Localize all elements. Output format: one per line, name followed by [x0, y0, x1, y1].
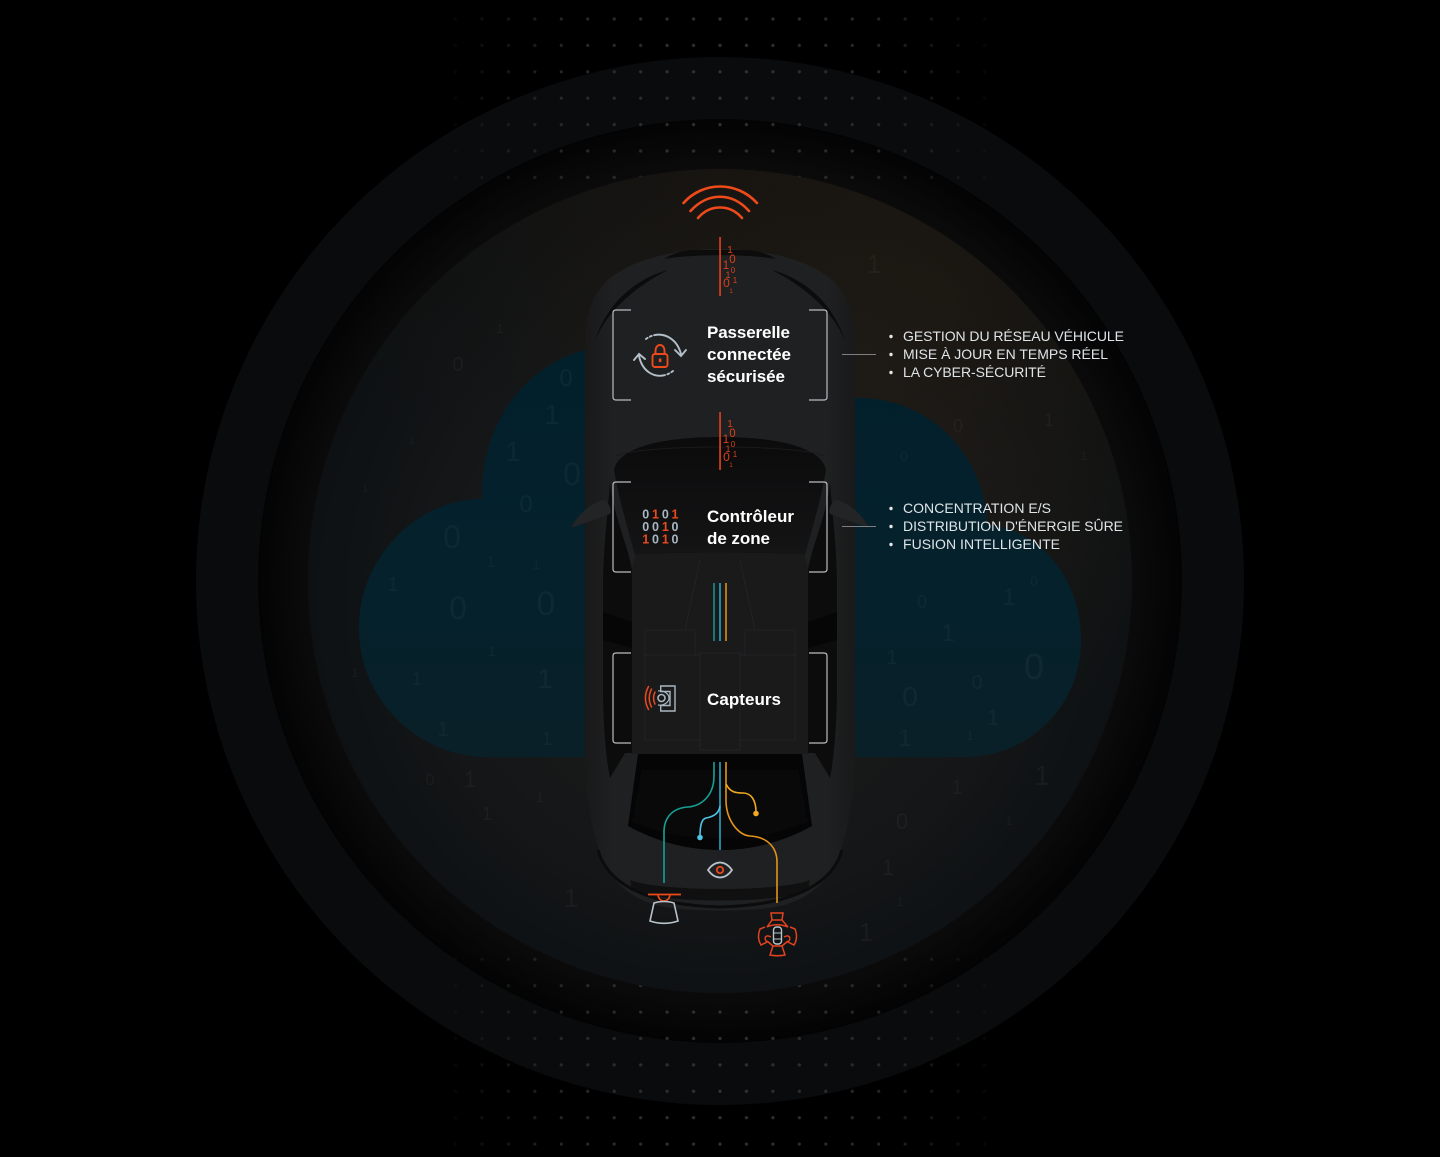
data link: binary stream middle: 1 — [725, 444, 731, 454]
data link: binary stream top: 1 — [727, 245, 733, 256]
background binary digits: 1 — [487, 554, 496, 571]
background binary digits: 1 — [951, 777, 963, 799]
windshield — [614, 437, 826, 555]
data link: binary stream top: 1 — [733, 276, 738, 285]
data link: binary stream middle: 1 — [723, 434, 729, 446]
background binary digits: 1 — [533, 558, 540, 572]
background binary digits: 1 — [1006, 814, 1013, 828]
background binary digits: 1 — [482, 804, 492, 824]
background binary digits: 0 — [537, 585, 555, 623]
text list: zone controller functions — [889, 500, 1123, 552]
side window dark bands — [603, 612, 837, 648]
background binary digits: 0 — [1024, 646, 1044, 687]
background binary digits: 1 — [967, 729, 974, 743]
connector line zone controller — [842, 526, 876, 528]
cabin interior — [632, 553, 808, 754]
icon: radar sensor — [648, 894, 681, 923]
orange wire to surround sensor — [726, 762, 777, 903]
background binary digits: 1 — [882, 855, 894, 880]
teal wire to radar — [664, 762, 714, 883]
data link: binary stream top — [719, 237, 738, 296]
wires to rear sensors — [664, 762, 777, 903]
icon: binary grid: 1 — [652, 508, 659, 522]
heading: Passerelle connectée sécurisée: Passerelle — [707, 323, 790, 342]
text list: zone controller functions: FUSION INTELLIGENTE — [903, 536, 1060, 552]
car top view — [571, 249, 869, 910]
background binary digits: 1 — [409, 436, 415, 447]
data link: binary stream middle: 0 — [723, 450, 730, 464]
icon: binary grid: 0 — [652, 532, 659, 546]
text list: zone controller functions: CONCENTRATION E/S — [903, 500, 1051, 516]
wires between controller and sensors — [714, 583, 726, 641]
background binary digits: 1 — [867, 249, 881, 279]
background binary digits — [352, 249, 1088, 947]
heading: Capteurs: Capteurs — [707, 690, 781, 709]
background binary digits: 0 — [443, 519, 461, 555]
data link: binary stream middle: 1 — [733, 450, 738, 459]
bracket frame — [613, 310, 827, 400]
background binary digits: 1 — [505, 436, 521, 467]
light blue branch — [697, 806, 720, 840]
background binary digits: 1 — [544, 399, 560, 430]
icon: binary grid: 1 — [642, 532, 649, 546]
text list: gateway functions: MISE À JOUR EN TEMPS RÉEL — [903, 346, 1108, 362]
icon: binary grid: 0 — [652, 520, 659, 534]
connector line gateway — [842, 354, 876, 356]
background binary digits: 1 — [897, 895, 904, 909]
panel: zone controller — [613, 482, 827, 572]
hood vents — [595, 250, 845, 340]
text list: gateway functions: LA CYBER-SÉCURITÉ — [903, 364, 1046, 380]
cloud — [359, 345, 1081, 757]
data link: binary stream top: 0 — [729, 254, 736, 266]
background binary digits: 0 — [900, 448, 908, 464]
icon: binary grid: 1 — [662, 532, 669, 546]
heading: Passerelle connectée sécurisée: connectée — [707, 345, 791, 364]
text list: zone controller functions: DISTRIBUTION D'ÉNERGIE SÛRE — [903, 518, 1123, 534]
panel: sensors — [613, 653, 827, 743]
orange branch — [726, 784, 759, 816]
heading: Passerelle connectée sécurisée — [707, 323, 791, 386]
icon: camera eye — [708, 862, 732, 878]
interior seats — [645, 560, 795, 750]
background binary digits: 1 — [1044, 410, 1054, 430]
icon: rotating padlock — [634, 335, 686, 376]
icon: binary grid: 0 — [662, 508, 669, 522]
data link: binary stream middle: 1 — [727, 419, 733, 430]
background binary digits: 1 — [464, 767, 476, 792]
background binary digits: 0 — [449, 590, 467, 626]
text list: gateway functions: GESTION DU RÉSEAU VÉHICULE — [903, 328, 1124, 344]
background binary digits: 0 — [452, 354, 464, 376]
background binary digits: 1 — [898, 725, 912, 752]
background binary digits: 1 — [859, 917, 873, 947]
background binary digits: 1 — [1081, 449, 1088, 463]
background binary digits: 1 — [886, 647, 898, 669]
icon: wifi signal — [684, 186, 757, 218]
icon: binary grid: 0 — [672, 520, 679, 534]
data link: binary stream top: 0 — [723, 276, 730, 290]
icon: binary grid: 1 — [662, 520, 669, 534]
background binary digits: 1 — [537, 663, 553, 694]
background binary digits: 1 — [987, 705, 999, 730]
background binary digits: 1 — [437, 719, 449, 741]
background binary digits: 1 — [564, 883, 578, 913]
data link: binary stream top: 0 — [731, 266, 736, 275]
icon: binary grid: 0 — [642, 508, 649, 522]
car mirrors — [571, 500, 869, 528]
background binary digits: 1 — [941, 620, 955, 647]
bracket frame — [613, 482, 827, 572]
background binary digits: 0 — [917, 592, 927, 612]
data link: binary stream middle: 0 — [729, 428, 736, 440]
background binary digits: 1 — [496, 321, 504, 336]
background binary digits: 0 — [426, 772, 435, 789]
background binary digits: 1 — [412, 669, 422, 689]
background binary digits: 0 — [1030, 573, 1038, 589]
data link: binary stream top: 1 — [725, 270, 731, 280]
background binary digits: 0 — [953, 416, 963, 436]
side windows — [603, 482, 837, 778]
icon: binary grid: 0 — [642, 520, 649, 534]
blue wire to camera — [719, 762, 721, 850]
background binary digits: 0 — [971, 672, 983, 694]
rear bumper — [630, 880, 810, 900]
background binary digits: 1 — [352, 666, 359, 680]
background binary digits: 0 — [559, 365, 573, 392]
panel: secure gateway — [613, 310, 827, 400]
background binary digits: 0 — [902, 681, 918, 712]
data link: binary stream top: 1 — [723, 260, 729, 272]
background binary digits: 0 — [563, 456, 581, 492]
concentric circles — [196, 6, 1244, 1157]
background binary digits: 1 — [387, 574, 399, 596]
rear window — [628, 754, 812, 850]
icon: binary grid: 0 — [672, 532, 679, 546]
data link: binary stream middle: 1 — [729, 463, 733, 469]
background binary digits: 1 — [1034, 760, 1050, 791]
heading: Passerelle connectée sécurisée: sécurisée — [707, 367, 785, 386]
heading: Contrôleur de zone — [707, 507, 794, 548]
data link: binary stream top: 1 — [729, 289, 733, 295]
icon: binary grid: 1 — [672, 508, 679, 522]
icon: surround sensors car — [759, 913, 796, 956]
background binary digits: 1 — [362, 484, 368, 495]
data link: binary stream middle: 0 — [731, 440, 736, 449]
car body — [585, 249, 855, 910]
background binary digits: 1 — [536, 789, 544, 805]
bracket frame — [613, 653, 827, 743]
background binary digits: 1 — [1002, 584, 1016, 611]
data link: binary stream middle — [719, 412, 738, 470]
background binary digits: 0 — [519, 491, 533, 518]
background binary digits: 1 — [488, 643, 496, 659]
text list: gateway functions — [889, 328, 1124, 380]
icon: binary grid — [642, 508, 679, 546]
icon: sensor — [646, 686, 675, 711]
heading: Contrôleur de zone: de zone — [707, 529, 770, 548]
background binary digits: 1 — [542, 729, 552, 749]
heading: Contrôleur de zone: Contrôleur — [707, 507, 794, 526]
background binary digits: 0 — [896, 809, 908, 834]
